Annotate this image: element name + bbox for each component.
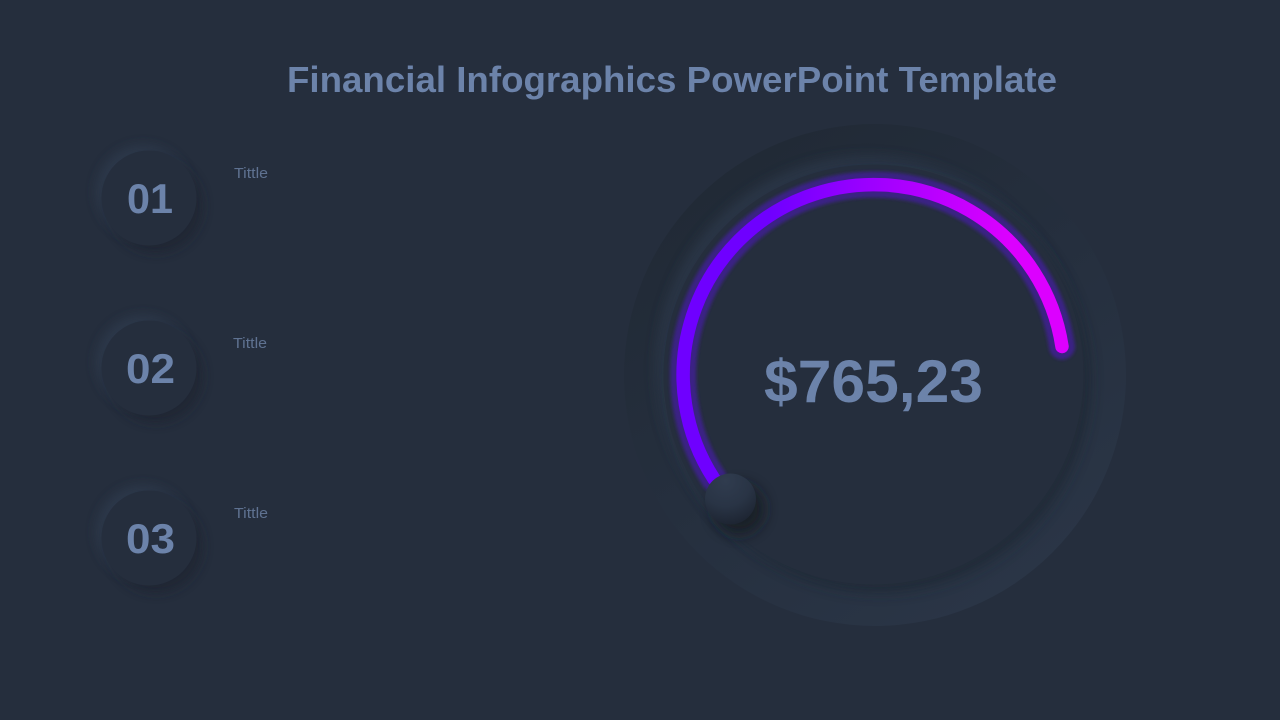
- list item 03: [96, 485, 268, 593]
- gauge value: $765,23: [764, 348, 983, 415]
- arc glow: [683, 185, 1062, 479]
- gauge: [624, 124, 1126, 626]
- badge 02: 02: [126, 345, 175, 392]
- label 02: Tittle: [233, 336, 267, 352]
- progress arc: [683, 185, 1062, 479]
- label 03: Tittle: [234, 506, 268, 522]
- badge 01: 01: [127, 175, 173, 222]
- label 01: Tittle: [234, 166, 268, 182]
- knob: [705, 474, 764, 534]
- badge 02: [96, 315, 203, 423]
- badge 03: 03: [126, 515, 175, 562]
- title: Financial Infographics PowerPoint Template: [287, 59, 1057, 100]
- list item 01: [96, 145, 268, 253]
- gauge outer recessed ring: [624, 124, 1126, 626]
- badge 01: [96, 145, 203, 253]
- gauge inner raised dial: [657, 157, 1091, 593]
- badge 03: [96, 485, 203, 593]
- list item 02: [96, 315, 267, 423]
